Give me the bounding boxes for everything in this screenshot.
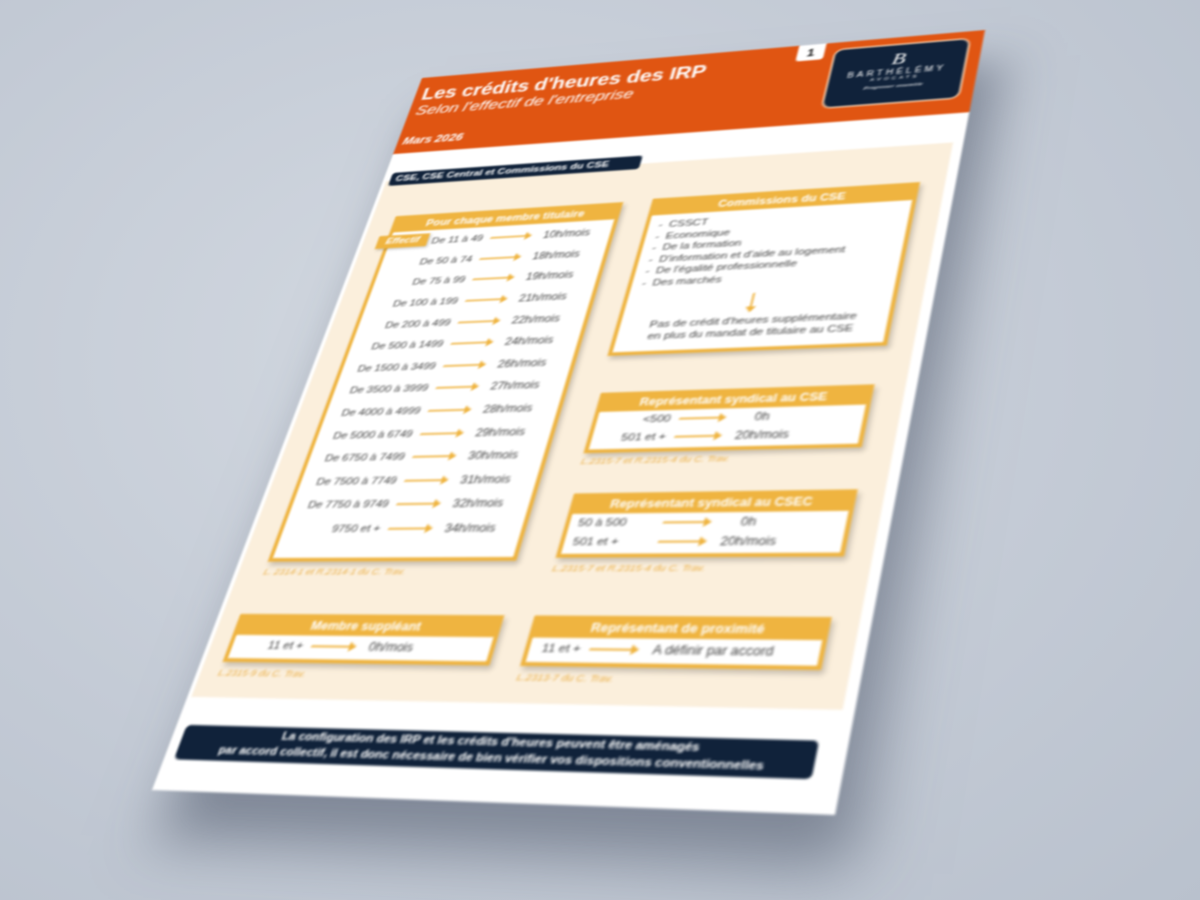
title: Les crédits d'heures des IRP xyxy=(419,62,709,103)
bottom banner: La configuration des IRP et les crédits d'heures peuvent être aménagés xyxy=(280,730,701,754)
rows: 34h/mois xyxy=(443,521,497,535)
footnote CSEC: L.2315-7 et R.2315-4 du C. Trav. xyxy=(551,563,706,574)
list: - De l'égalité professionnelle xyxy=(644,259,798,276)
rows: De 7500 à 7749 xyxy=(314,475,398,487)
rows: 21h/mois xyxy=(517,290,568,304)
panel: representant de proximite: A définir par accord xyxy=(651,643,775,659)
rows: De 500 à 1499 xyxy=(370,339,445,352)
logo: AVOCATS xyxy=(870,74,920,83)
list: - Economique xyxy=(654,228,731,241)
panel: representant syndical CSE: <500 xyxy=(642,414,672,425)
rows: 31h/mois xyxy=(459,472,512,486)
rows: 32h/mois xyxy=(451,497,505,510)
page number tab: 1 xyxy=(806,46,816,59)
rows: De 75 à 99 xyxy=(411,275,467,288)
panel: membre suppleant: Membre suppléant xyxy=(309,619,423,634)
panel: representant syndical CSEC: Représentant syndical au CSEC xyxy=(609,495,814,511)
rows: 29h/mois xyxy=(474,425,527,439)
rows: De 50 à 74 xyxy=(418,255,474,267)
rows: De 100 à 199 xyxy=(391,296,459,309)
panel: membre suppleant: 11 et + xyxy=(266,640,305,652)
rows: De 3500 à 3999 xyxy=(348,384,430,396)
rows: De 11 à 49 xyxy=(430,234,484,246)
footnote titulaire: L. 2314-1 et R.2314-1 du C. Trav. xyxy=(262,567,407,577)
logo xyxy=(820,38,971,109)
note: Pas de crédit d'heures supplémentaire xyxy=(648,311,858,330)
list: - CSSCT xyxy=(657,218,709,230)
panel: membre titulaire xyxy=(268,202,623,562)
panel: membre suppleant xyxy=(223,614,504,666)
section label: CSE, CSE Central et Commissions du CSE xyxy=(394,160,610,183)
header band xyxy=(393,30,985,154)
rows: 10h/mois xyxy=(541,227,592,241)
rows: De 6750 à 7499 xyxy=(323,452,406,464)
page sheet xyxy=(152,30,985,815)
panel: representant syndical CSEC: 20h/mois xyxy=(719,534,778,548)
logo: BARTHÉLÉMY xyxy=(846,64,947,80)
header: Pour chaque membre titulaire xyxy=(424,208,586,228)
rows: De 1500 à 3499 xyxy=(356,361,437,374)
logo: Progresser ensemble xyxy=(863,81,924,91)
rows: 30h/mois xyxy=(466,449,520,462)
footnote proximite: L.2313-7 du C. Trav. xyxy=(515,672,614,685)
rows: 28h/mois xyxy=(481,402,534,415)
footnote suppleant: L.2315-9 du C. Trav. xyxy=(216,668,307,680)
panel: representant syndical CSEC: 501 et + xyxy=(571,536,620,548)
panel: representant syndical CSEC: 50 à 500 xyxy=(577,517,628,529)
panel: representant de proximite: 11 et + xyxy=(540,643,582,655)
rows: 18h/mois xyxy=(531,248,581,262)
panel: commissions xyxy=(607,182,920,356)
footnote CSE: L.2315-7 et R.2315-4 du C. Trav. xyxy=(580,454,731,467)
header xyxy=(652,186,915,216)
rows: De 5000 à 6749 xyxy=(331,429,414,441)
list: - D'information et d'aide au logement xyxy=(648,244,846,265)
rows: 9750 et + xyxy=(330,523,382,535)
rows: De 7750 à 9749 xyxy=(306,499,390,511)
rows: 19h/mois xyxy=(524,269,575,283)
beige panel xyxy=(191,142,953,710)
panel: representant de proximite: Représentant de proximité xyxy=(589,621,766,636)
page number tab xyxy=(795,44,827,62)
date: Mars 2026 xyxy=(401,131,465,147)
logo: B xyxy=(890,49,908,68)
rows: 22h/mois xyxy=(510,312,562,326)
list xyxy=(641,217,847,288)
rows xyxy=(306,227,592,535)
rows: 24h/mois xyxy=(503,334,555,348)
panel: representant syndical CSE: 20h/mois xyxy=(734,428,790,442)
panel: representant syndical CSE xyxy=(584,384,875,453)
panel: representant syndical CSE: Représentant syndical au CSE xyxy=(638,390,828,408)
panel: representant syndical CSE: 0h xyxy=(753,410,771,423)
effectif tag: Effectif xyxy=(384,235,421,246)
rows: 26h/mois xyxy=(496,356,548,370)
list: - Des marchés xyxy=(641,274,723,288)
subtitle: Selon l'effectif de l'entreprise xyxy=(413,86,636,118)
rows: De 4000 à 4999 xyxy=(340,406,422,418)
note: en plus du mandat de titulaire au CSE xyxy=(646,323,854,342)
panel: representant syndical CSEC xyxy=(556,489,858,558)
panel: representant syndical CSE: 501 et + xyxy=(620,432,667,443)
panel: membre suppleant: 0h/mois xyxy=(367,640,415,654)
header xyxy=(393,205,618,232)
bottom banner xyxy=(174,725,819,779)
effectif tag xyxy=(375,233,430,249)
panel: representant syndical CSEC: 0h xyxy=(739,515,758,528)
note xyxy=(646,311,858,342)
arrow down xyxy=(749,293,755,308)
panel: representant de proximite xyxy=(520,615,832,670)
list: - De la formation xyxy=(651,238,743,253)
section label xyxy=(388,156,643,186)
bottom banner: par accord collectif, il est donc nécessaire de bien vérifier vos dispositions conventionnelles xyxy=(216,744,765,773)
rows: 27h/mois xyxy=(489,379,541,392)
header: Commissions du CSE xyxy=(717,191,847,209)
rows: De 200 à 499 xyxy=(384,318,452,330)
